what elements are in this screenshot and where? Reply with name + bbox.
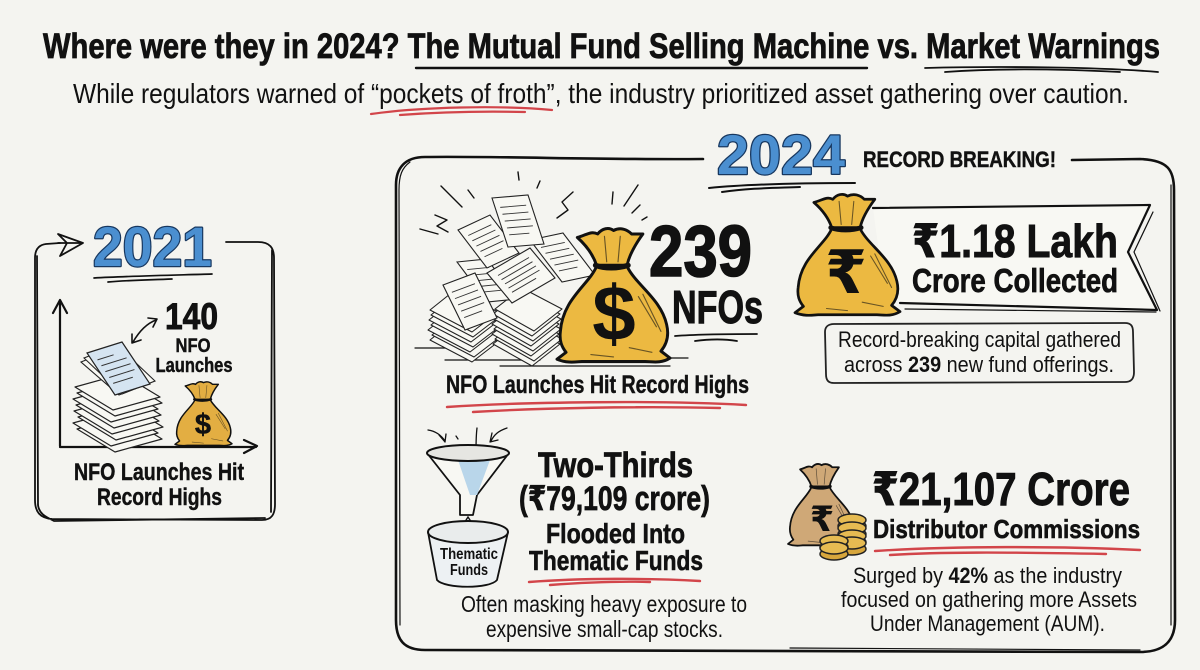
stat: two-thirds: Thematic Funds: [529, 545, 703, 576]
stat: 1.18 lakh crore: ₹1.18 Lakh: [912, 215, 1118, 267]
double arrow: [132, 318, 157, 343]
stat: two-thirds: (₹79,109 crore): [519, 480, 710, 518]
note: thematic funds: [461, 591, 747, 642]
stat: 1.18 lakh crore: [795, 194, 1160, 315]
stat 140: Launches: [156, 355, 232, 377]
icon: dollar money bag: $: [592, 269, 636, 357]
icon: money bag small: $: [195, 409, 211, 441]
note: commissions: focused on gathering more Assets: [841, 587, 1137, 612]
stat: distributor commissions: ₹21,107 Crore: [872, 463, 1130, 515]
caption: NFO launches: NFO Launches Hit Record Highs: [446, 371, 749, 399]
icon: money bag small: [175, 382, 232, 446]
note box: Record-breaking capital gathered: [838, 327, 1121, 352]
stat 140: [156, 296, 232, 377]
stat 239 NFOs: 239: [649, 212, 752, 292]
icon: rupee money bag: [795, 194, 900, 315]
arrows into funnel: [428, 428, 507, 453]
caption 2021: NFO Launches Hit: [74, 459, 244, 486]
icon: dollar money bag: [557, 229, 670, 362]
stat: two-thirds: Flooded Into: [546, 518, 685, 549]
caption 2021: [74, 459, 244, 511]
motion marks: [420, 172, 647, 234]
stat: two-thirds: Two-Thirds: [538, 446, 693, 485]
panel: 2024: [396, 123, 1175, 652]
icon: brown bag with coins: [788, 464, 866, 560]
panel: 2021: [35, 215, 275, 521]
icon: funnel into cup: Thematic: [440, 546, 498, 563]
icon: brown bag with coins: ₹: [810, 500, 834, 539]
stat 140: NFO: [176, 336, 210, 357]
note box: [825, 323, 1134, 383]
year 2024: 2024: [717, 123, 845, 186]
stat: 1.18 lakh crore: Crore Collected: [912, 262, 1118, 299]
ribbon: [873, 205, 1157, 310]
note: commissions: Under Management (AUM).: [870, 611, 1105, 636]
caption 2021: Record Highs: [97, 484, 222, 511]
year 2021: 2021: [93, 215, 212, 278]
note: thematic funds: Often masking heavy exposure to: [461, 591, 747, 617]
icon: paper pile: [415, 195, 688, 366]
stat 140: 140: [165, 296, 218, 337]
stat 239 NFOs: NFOs: [672, 281, 763, 333]
note box: across 239 new fund offerings.: [844, 352, 1114, 377]
icon: rupee money bag: ₹: [825, 239, 867, 306]
stat: distributor commissions: Distributor Commissions: [873, 514, 1140, 544]
stat: two-thirds: [519, 446, 710, 585]
caption: NFO launches: [446, 371, 749, 412]
icon: funnel into cup: Funds: [450, 562, 488, 579]
icon: paper stack: [73, 342, 163, 452]
note: commissions: [841, 563, 1137, 636]
panel frame 2021: [35, 242, 275, 521]
panel frame 2024: [396, 157, 1175, 652]
note: commissions: Surged by 42% as the industry: [853, 563, 1122, 588]
icon: funnel into cup: [427, 428, 509, 587]
note: thematic funds: expensive small-cap stocks.: [486, 616, 723, 642]
arrow into year 2021: [58, 234, 83, 256]
chart axes: [53, 300, 257, 453]
stat: distributor commissions: [872, 463, 1140, 555]
record breaking label: RECORD BREAKING!: [863, 147, 1056, 172]
stat 239 NFOs: [649, 212, 763, 341]
